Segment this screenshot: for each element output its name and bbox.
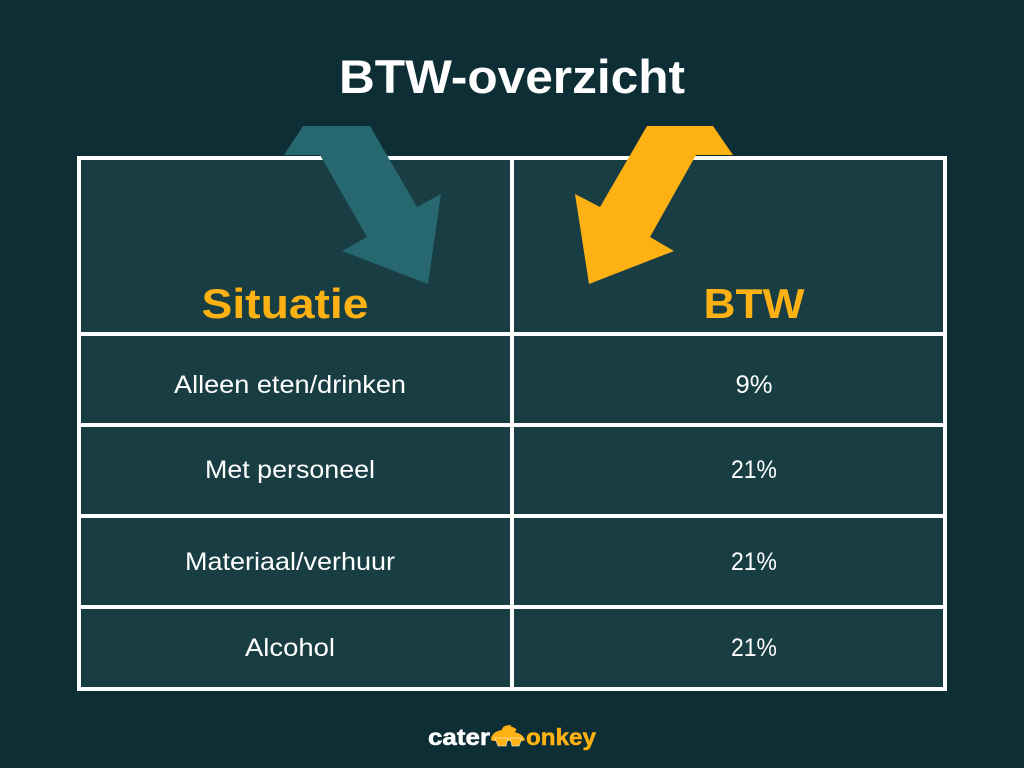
row 4 rate: 21%	[731, 634, 777, 662]
row 3 rate: 21%	[731, 548, 777, 576]
row 2 rate: 21%	[731, 456, 777, 484]
logo: catermonkey	[428, 724, 596, 750]
row 1 rate: 9%	[736, 371, 772, 399]
arrow: orange pointing to BTW	[575, 126, 733, 284]
arrow: teal pointing to Situatie	[284, 126, 441, 284]
header: BTW: BTW	[704, 280, 805, 327]
row 3 situation: Materiaal/verhuur	[185, 548, 395, 576]
row 1 situation: Alleen eten/drinken	[174, 371, 406, 399]
logo icon: monkey head with glasses	[491, 725, 525, 746]
logo text: onkey: onkey	[526, 724, 596, 750]
title: BTW-overzicht	[339, 50, 685, 103]
row 2 situation: Met personeel	[205, 456, 375, 484]
header: Situatie: Situatie	[202, 280, 368, 327]
logo text: cater: cater	[428, 724, 490, 750]
row 4 situation: Alcohol	[245, 634, 335, 662]
table	[79, 158, 945, 689]
